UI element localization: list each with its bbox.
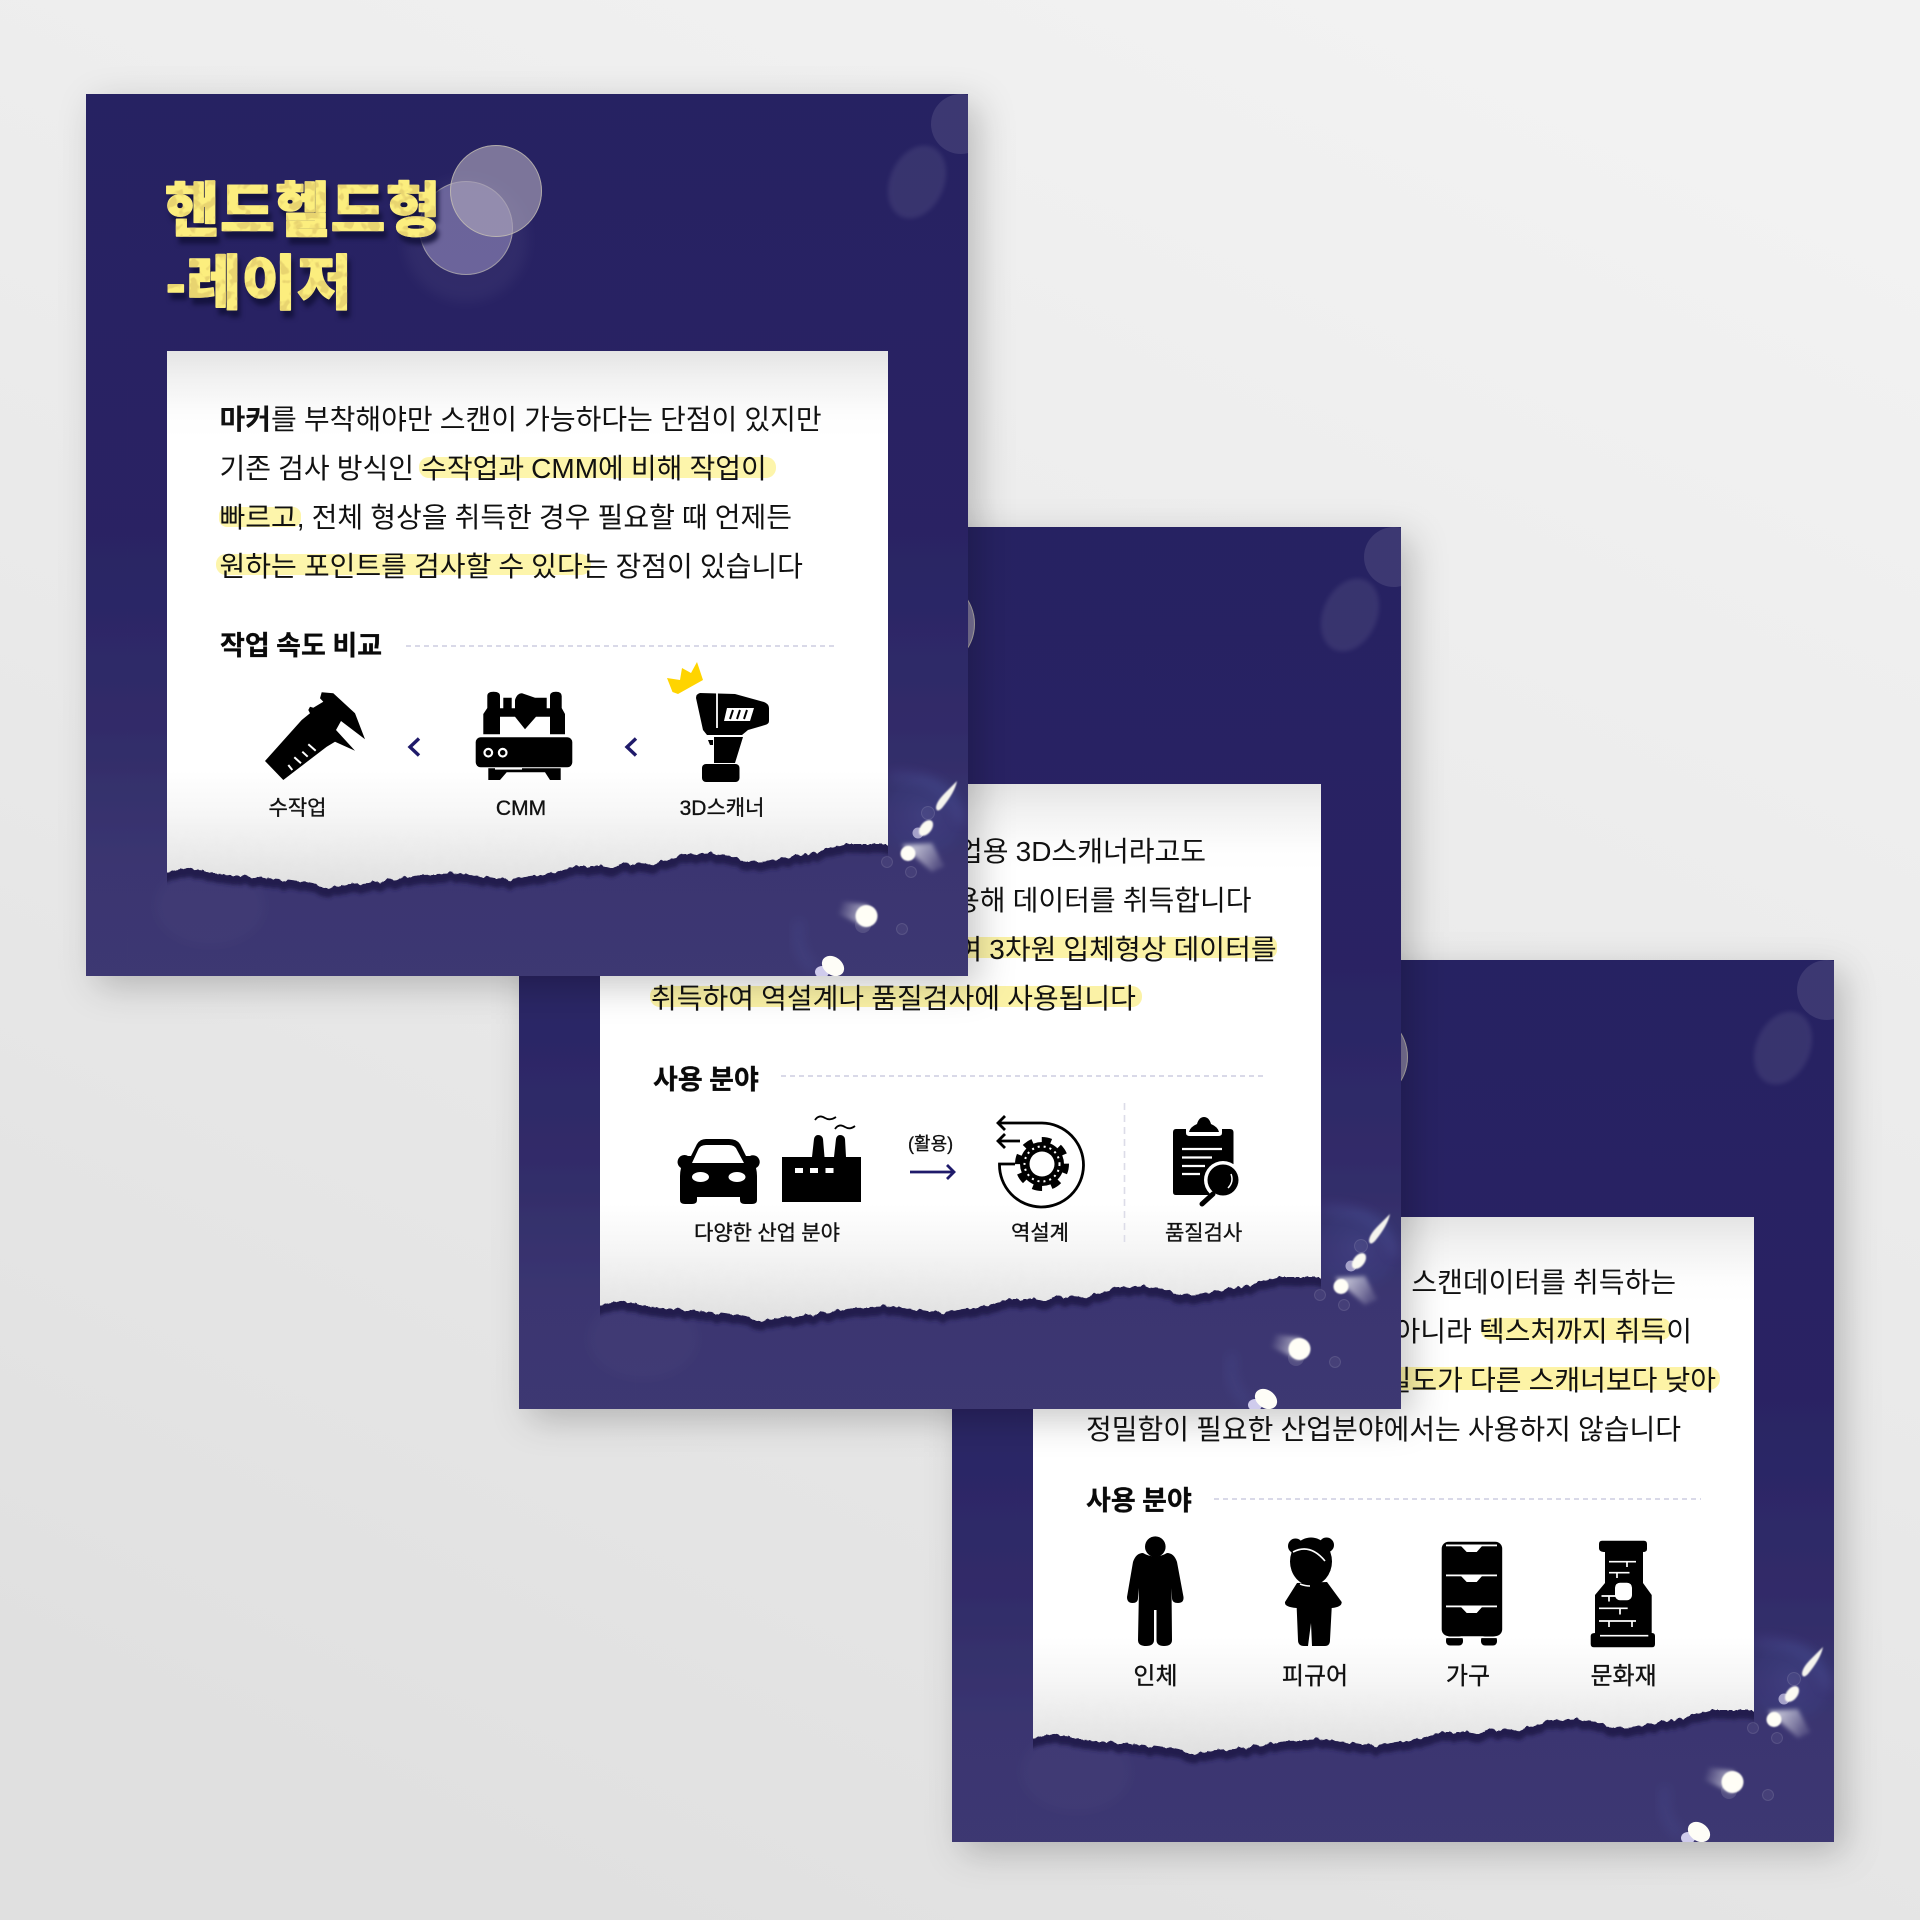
icon: CMM bbox=[476, 692, 572, 780]
card 1 heading: 작업 속도 비교 bbox=[220, 631, 382, 661]
card 3 text block: 정밀함이 필요한 산업분야에서는 사용하지 않습니다 bbox=[1086, 1414, 1681, 1445]
card 1 highlights bbox=[216, 457, 776, 575]
card 2 text block: 취득하여 역설계나 품질검사에 사용됩니다 bbox=[651, 983, 1136, 1014]
card 1 text block: 빠르고, 전체 형상을 취득한 경우 필요할 때 언제든 bbox=[220, 502, 792, 533]
card 3 labels: 피규어 bbox=[1282, 1663, 1348, 1690]
icon: 3D scanner with crown bbox=[667, 662, 769, 782]
card 3 labels: 인체 bbox=[1133, 1663, 1178, 1690]
card 3 text block bbox=[1086, 1267, 1716, 1445]
card 2 text block: 이용해 데이터를 취득합니다 bbox=[928, 885, 1252, 916]
icon: factory bbox=[782, 1116, 861, 1202]
card 2 labels: 다양한 산업 분야 bbox=[694, 1222, 840, 1245]
arrow bbox=[910, 1165, 954, 1179]
icon: reverse engineering bbox=[998, 1116, 1083, 1207]
icon: quality inspection bbox=[1173, 1117, 1242, 1204]
card 1 labels: CMM bbox=[496, 797, 546, 820]
panel: card 3 bbox=[952, 960, 1857, 1846]
panel: card 2 bbox=[519, 527, 1424, 1413]
card 2 text block bbox=[651, 836, 1277, 1014]
card 1 text block: 기존 검사 방식인 수작업과 CMM에 비해 작업이 bbox=[220, 453, 767, 484]
card 2 labels: 품질검사 bbox=[1165, 1222, 1242, 1245]
icon: human body bbox=[1127, 1536, 1184, 1646]
card 1 labels bbox=[269, 797, 764, 820]
title: -레이저 bbox=[166, 251, 352, 317]
card 1 base bbox=[86, 94, 991, 980]
card 2 base bbox=[519, 527, 1424, 1413]
icon: cabinet bbox=[1442, 1542, 1502, 1646]
card 2 labels: 역설계 bbox=[1011, 1222, 1069, 1245]
chevron bbox=[410, 738, 419, 756]
title bbox=[165, 178, 441, 317]
card 1 text block bbox=[220, 404, 822, 582]
title: 핸드헬드형 bbox=[165, 178, 441, 244]
card 3 highlights bbox=[1300, 1318, 1720, 1390]
icon: caliper bbox=[265, 692, 365, 780]
card 3 text block: 정밀도가 다른 스캐너보다 낮아 bbox=[1360, 1365, 1716, 1396]
card 2 heading: 사용 분야 bbox=[653, 1065, 759, 1095]
card 1 labels: 3D스캐너 bbox=[680, 797, 764, 820]
card 3 text block: 하여 스캔데이터를 취득하는 bbox=[1353, 1267, 1676, 1298]
card 3 base bbox=[952, 960, 1857, 1846]
card 3 text block: 뿐만 아니라 텍스처까지 취득이 bbox=[1336, 1316, 1692, 1347]
card 2 highlights bbox=[650, 937, 1277, 1007]
card 2 text block: 산업용 3D스캐너라고도 bbox=[931, 836, 1206, 867]
card 1 labels: 수작업 bbox=[269, 797, 326, 820]
card 1 text block: 마커를 부착해야만 스캔이 가능하다는 단점이 있지만 bbox=[220, 404, 822, 435]
utilization label: (활용) bbox=[908, 1134, 953, 1154]
card 3 labels bbox=[1133, 1663, 1657, 1690]
icon: cultural heritage monument bbox=[1591, 1541, 1655, 1647]
panel: card 1 bbox=[86, 94, 991, 980]
card 2 text block: 하여 3차원 입체형상 데이터를 bbox=[931, 934, 1277, 965]
card 3 heading: 사용 분야 bbox=[1086, 1486, 1192, 1516]
card 3 labels: 문화재 bbox=[1590, 1663, 1657, 1690]
icon: car bbox=[678, 1139, 760, 1204]
card 1 text block: 원하는 포인트를 검사할 수 있다는 장점이 있습니다 bbox=[220, 551, 803, 582]
card 3 labels: 가구 bbox=[1446, 1663, 1490, 1690]
card 2 labels bbox=[694, 1222, 1242, 1245]
icon: figure bbox=[1285, 1538, 1342, 1646]
chevron bbox=[627, 738, 636, 756]
